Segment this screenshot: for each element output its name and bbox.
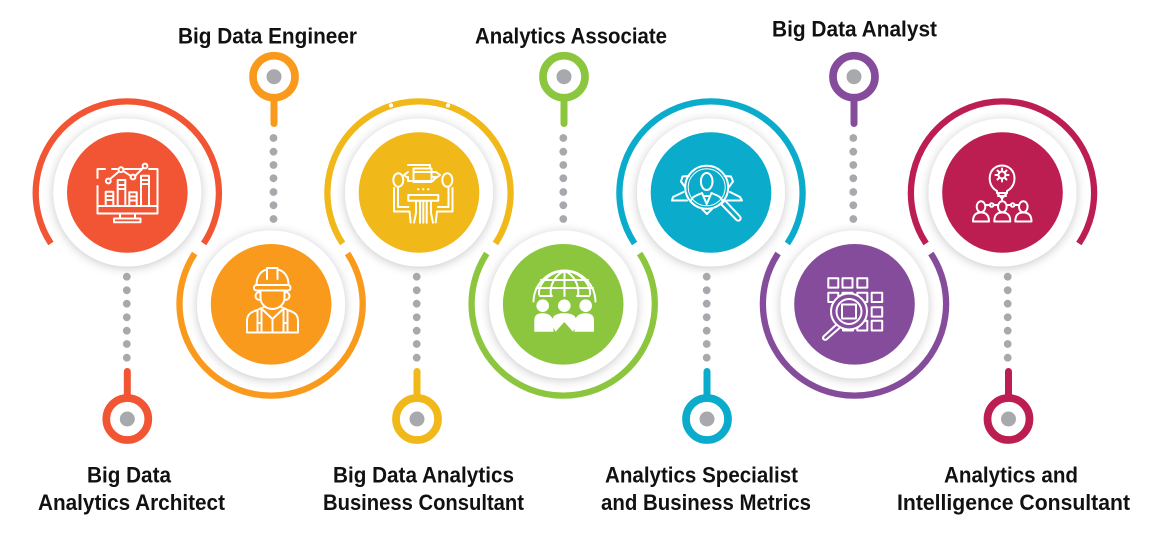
icon: magnifier over data grid xyxy=(823,278,882,340)
ring: step 1 xyxy=(36,101,219,244)
colour circle: step 4 xyxy=(503,244,624,365)
ring: step 7 xyxy=(911,101,1094,244)
white disc: step 4 xyxy=(489,230,637,378)
pin: step 3 xyxy=(396,372,438,440)
pin: step 7 xyxy=(988,372,1030,440)
white disc: step 5 xyxy=(637,118,785,266)
ring: step 2 xyxy=(180,254,363,396)
white disc: step 2 xyxy=(197,230,345,378)
label: step 1 xyxy=(38,462,226,515)
label: step 3: Business Consultant xyxy=(323,490,525,515)
label: step 5 xyxy=(601,462,811,515)
connector dots: step 3 xyxy=(413,273,421,362)
panel: step 5 Analytics Specialist and Business Metrics xyxy=(601,101,811,515)
ring nicks: step 3 xyxy=(389,103,450,108)
label: step 3 xyxy=(323,462,525,515)
pin: step 6 xyxy=(833,56,875,124)
panel: step 6 Big Data Analyst xyxy=(763,17,946,396)
colour circle: step 6 xyxy=(794,244,915,365)
connector dots: step 1 xyxy=(123,273,131,362)
label: step 6: Big Data Analyst xyxy=(772,17,938,42)
connector dots: step 6 xyxy=(849,134,857,223)
colour circle: step 5 xyxy=(651,132,771,253)
label: step 7 xyxy=(897,462,1131,515)
panel: step 2 Big Data Engineer xyxy=(178,23,363,396)
white disc: step 6 xyxy=(780,230,928,378)
ring: step 4 xyxy=(472,254,655,396)
connector dots: step 5 xyxy=(703,273,711,362)
label: step 1: Big Data xyxy=(87,462,172,488)
label: step 7: Analytics and xyxy=(944,462,1078,488)
ring: step 3 xyxy=(327,101,511,244)
label: step 1: Analytics Architect xyxy=(38,490,226,515)
label: step 4: Analytics Associate xyxy=(475,23,667,48)
connector dots: step 2 xyxy=(270,134,277,223)
panel: step 7 Analytics and Intelligence Consultant xyxy=(897,101,1131,515)
colour circle: step 7 xyxy=(942,132,1063,253)
connector dots: step 4 xyxy=(559,134,567,223)
panel: step 3 Big Data Analytics Business Consultant xyxy=(323,101,525,515)
panel: step 4 Analytics Associate xyxy=(472,23,667,396)
ring: step 5 xyxy=(619,101,803,244)
white disc: step 7 xyxy=(928,118,1076,266)
label: step 2: Big Data Engineer xyxy=(178,23,357,48)
white disc: step 1 xyxy=(53,118,201,266)
pin: step 1 xyxy=(106,372,148,440)
colour circle: step 3 xyxy=(359,132,479,253)
label: step 3: Big Data Analytics xyxy=(333,462,514,488)
icon: light bulb above connected team xyxy=(973,166,1032,222)
icon: monitor with bar chart xyxy=(98,164,158,222)
pin: step 2 xyxy=(253,56,295,124)
icon: two people meeting at table xyxy=(393,165,452,223)
icon: construction worker xyxy=(247,268,298,332)
label: step 5: Analytics Specialist xyxy=(605,462,799,488)
pin: step 5 xyxy=(686,372,728,440)
icon: magnifier over person xyxy=(672,166,742,221)
pin: step 4 xyxy=(543,56,585,124)
white disc: step 3 xyxy=(345,118,493,266)
connector dots: step 7 xyxy=(1004,273,1012,362)
label: step 5: and Business Metrics xyxy=(601,490,811,515)
panel: step 1 Big Data Analytics Architect xyxy=(36,101,226,515)
colour circle: step 1 xyxy=(67,132,188,253)
icon: globe above three people xyxy=(534,270,596,332)
colour circle: step 2 xyxy=(211,244,331,365)
label: step 7: Intelligence Consultant xyxy=(897,490,1131,515)
ring: step 6 xyxy=(763,254,946,396)
